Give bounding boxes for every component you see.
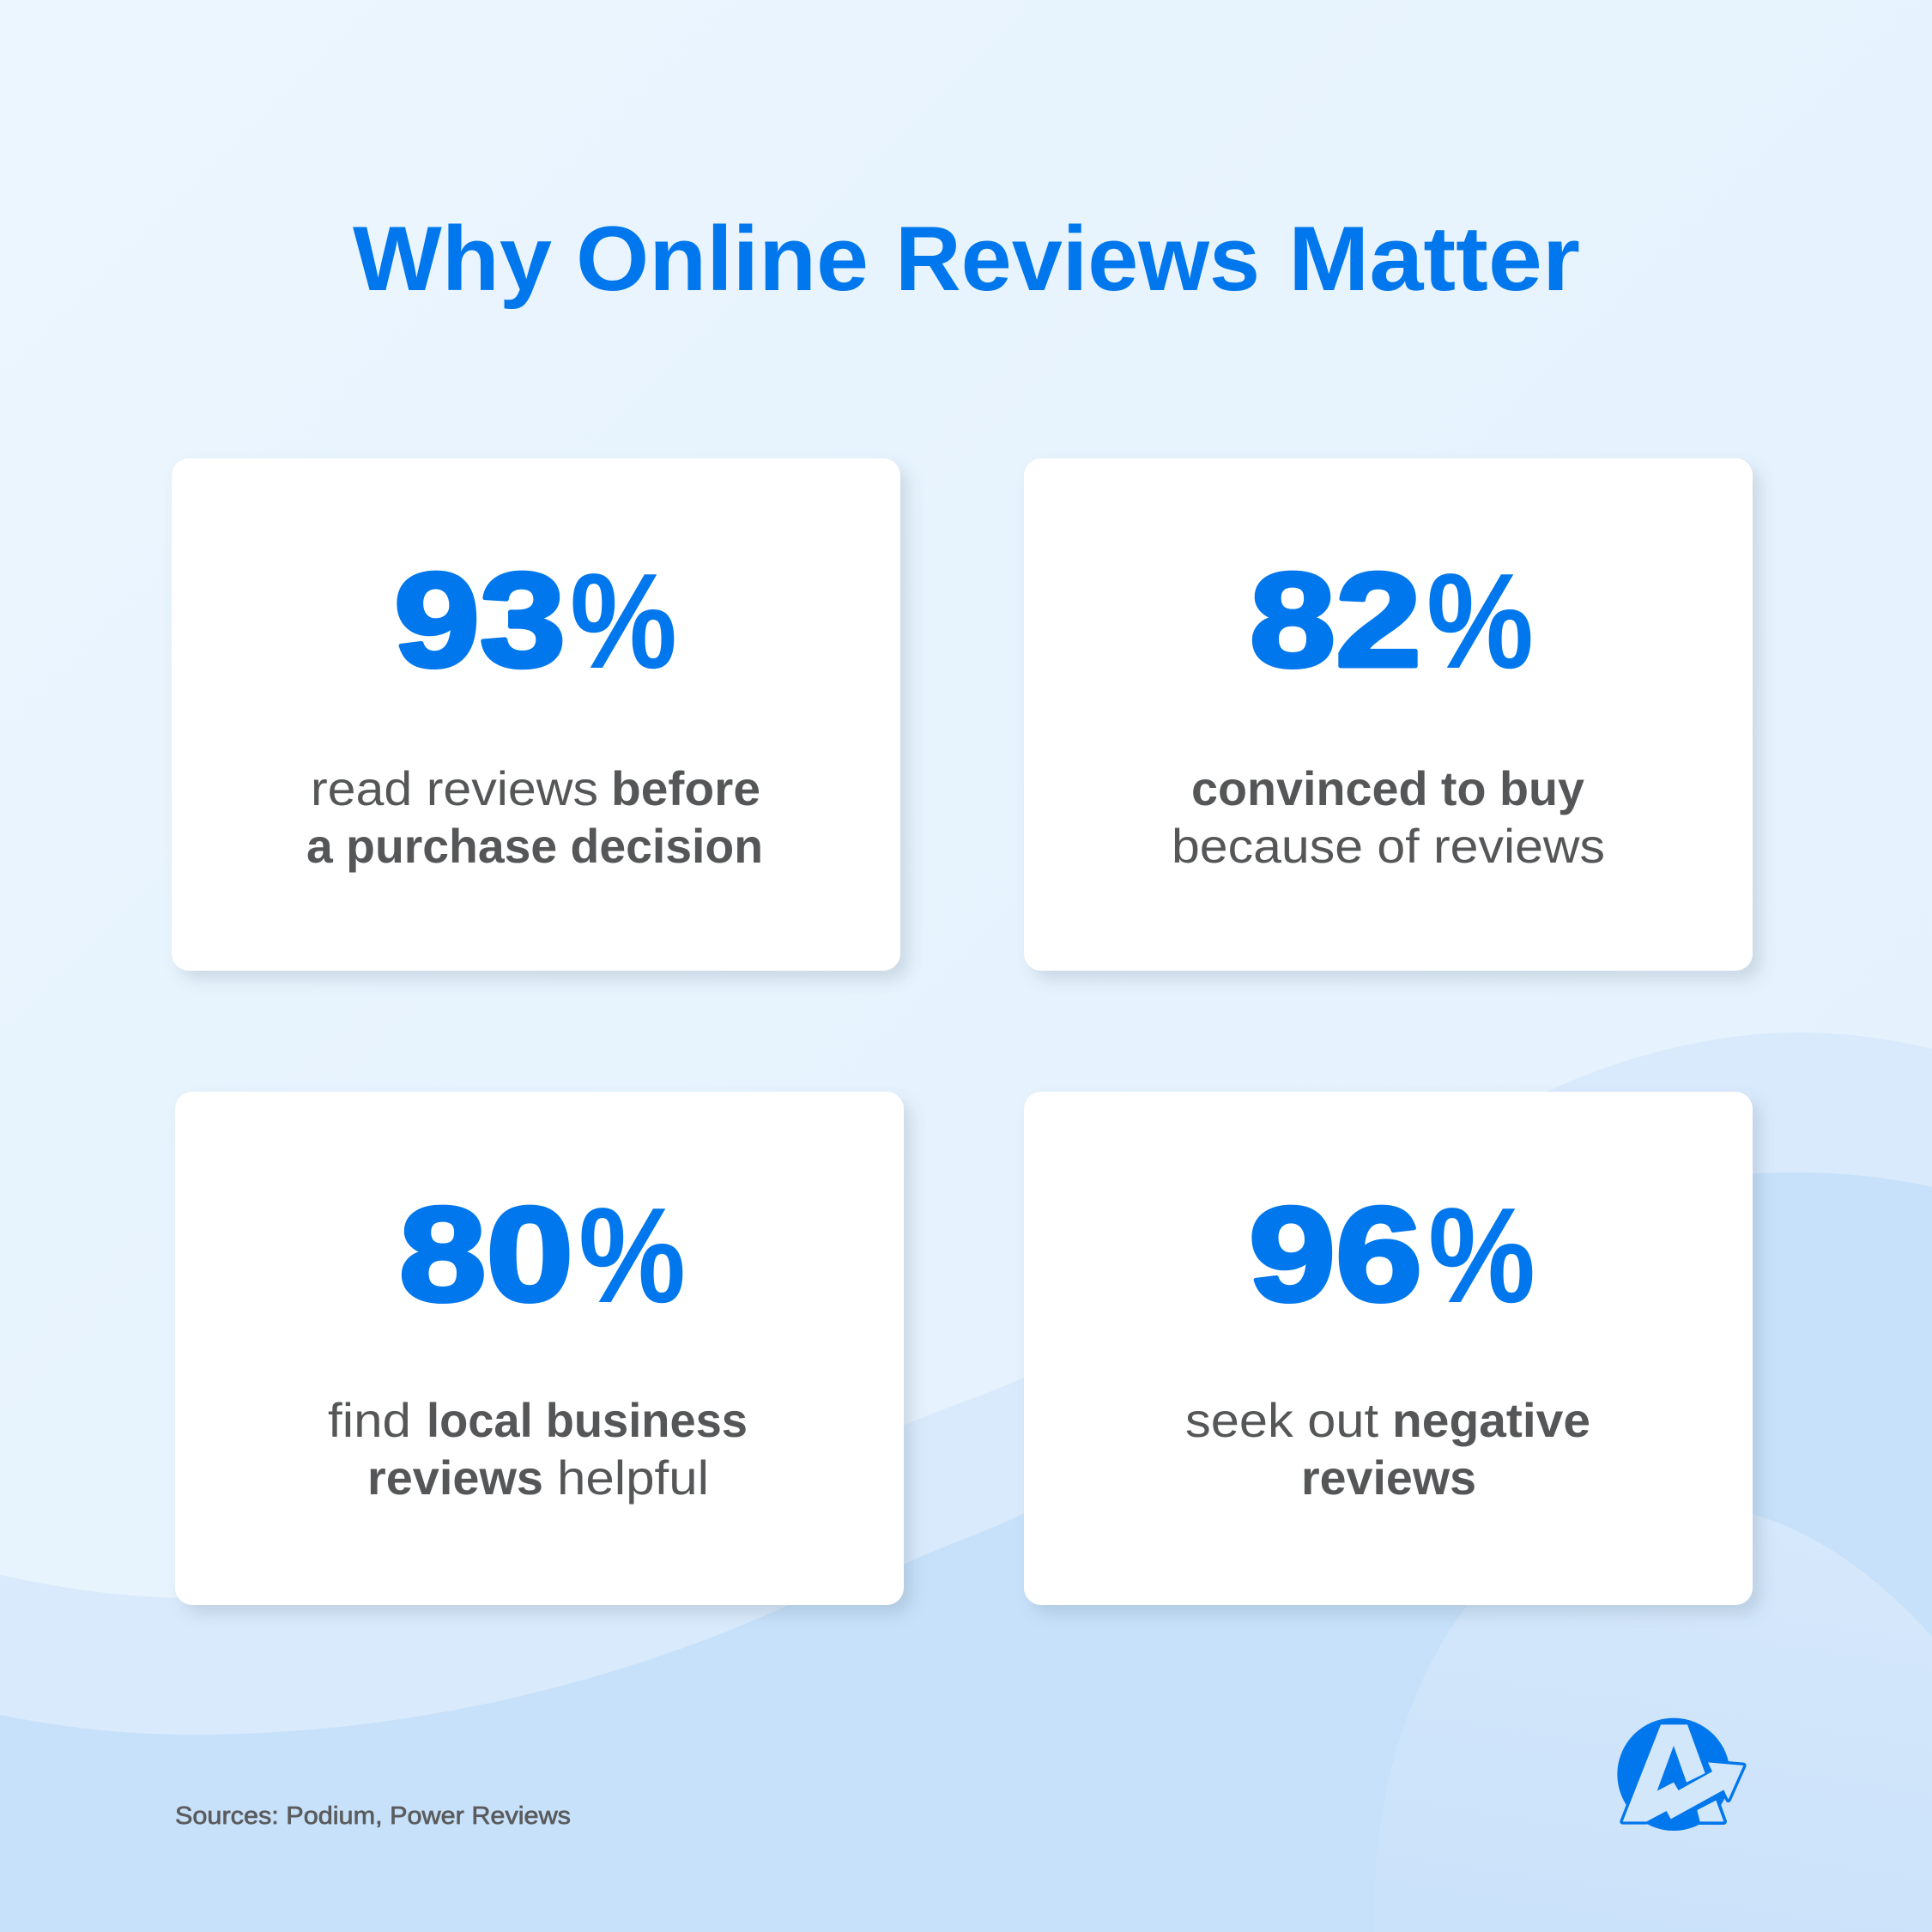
stat number: 80%: [399, 1180, 686, 1331]
stat number: 82%: 82: [1250, 546, 1421, 695]
description: seek out negative reviews: seek out: [1185, 1393, 1378, 1447]
stat number: 93%: %: [570, 546, 677, 697]
description: find local business reviews helpful: reviews: [367, 1451, 543, 1505]
title: Reviews: [895, 207, 1260, 310]
description: read reviews before a purchase decision: a purchase decision: [306, 819, 763, 873]
description: find local business reviews helpful: helpful: [557, 1451, 709, 1505]
panel: 82% stat: [1024, 458, 1753, 971]
background wave: light: [0, 1033, 1932, 1932]
background wave: mid: [0, 1172, 1932, 1932]
panel: 96% stat: [1024, 1092, 1753, 1605]
stat number: 96%: %: [1428, 1180, 1535, 1331]
description: read reviews before a purchase decision: [306, 761, 763, 873]
stat number: 80%: 80: [399, 1180, 573, 1329]
description: convinced to buy because of reviews: [1172, 761, 1605, 873]
icon: logo: [1617, 1718, 1743, 1831]
title: Matter: [1288, 207, 1580, 310]
title: Online: [576, 207, 869, 310]
panel: 93% stat: [172, 458, 900, 971]
stat number: 96%: 96: [1249, 1180, 1422, 1329]
stat number: 96%: [1249, 1180, 1535, 1331]
background blob: lower right: [1374, 1511, 1932, 1932]
sources note: Sources: Podium, Power Reviews: [175, 1802, 571, 1830]
description: seek out negative reviews: [1185, 1393, 1590, 1505]
stat number: 93%: [394, 546, 677, 697]
description: read reviews before a purchase decision: read reviews: [311, 761, 598, 815]
description: convinced to buy because of reviews: because of reviews: [1172, 819, 1605, 873]
stat number: 93%: 93: [394, 546, 566, 695]
stat number: 82%: [1250, 546, 1534, 697]
description: find local business reviews helpful: [328, 1393, 748, 1505]
stat number: 82%: %: [1426, 546, 1534, 697]
description: find local business reviews helpful: find: [328, 1393, 411, 1447]
description: find local business reviews helpful: local business: [427, 1393, 748, 1447]
stat number: 80%: %: [578, 1180, 686, 1331]
panel: 80% stat: [175, 1092, 904, 1605]
description: read reviews before a purchase decision: before: [611, 761, 760, 815]
description: seek out negative reviews: reviews: [1301, 1451, 1476, 1505]
description: seek out negative reviews: negative: [1392, 1393, 1590, 1447]
title: Why: [353, 207, 552, 310]
title: [353, 207, 1580, 310]
description: convinced to buy because of reviews: convinced to buy: [1191, 761, 1584, 815]
